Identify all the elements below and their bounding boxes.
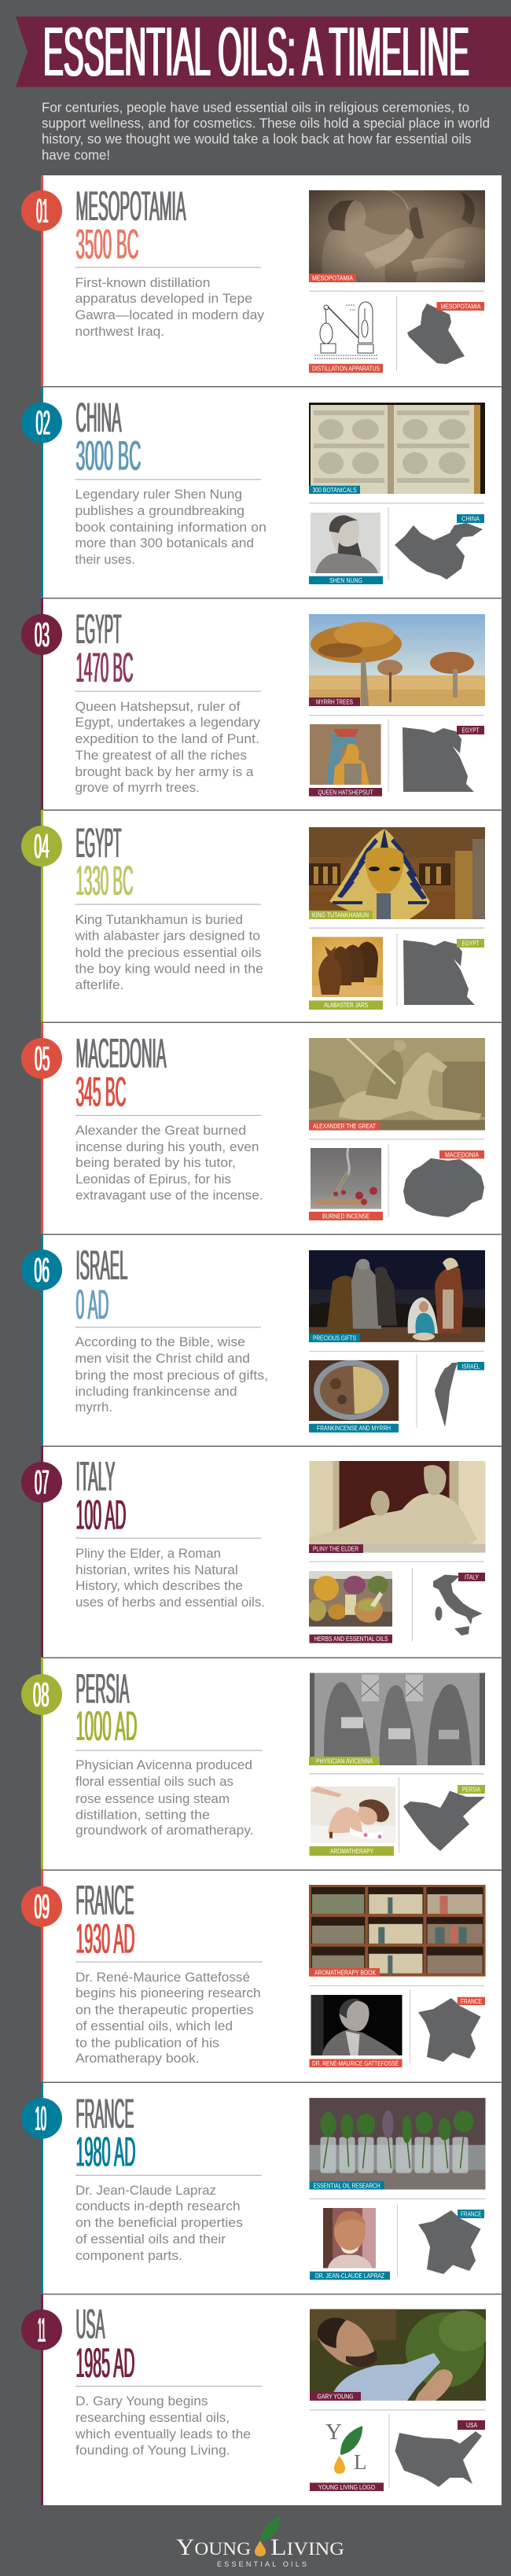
map: Egypt xyxy=(403,939,484,1005)
panel: 01 Mesopotamia xyxy=(21,175,485,387)
caption: GARY YOUNG xyxy=(318,2394,354,2400)
panel: 09 France xyxy=(21,1870,486,2082)
body text xyxy=(74,912,263,992)
body text: afterlife. xyxy=(75,977,124,992)
map: Macedonia xyxy=(403,1150,484,1217)
photo: old botanical book xyxy=(309,403,485,494)
map: Persia xyxy=(403,1785,485,1851)
number badge 11 xyxy=(21,2309,62,2350)
caption: 300 BOTANICALS xyxy=(313,487,357,494)
map label: EGYPT xyxy=(462,940,480,947)
logo: Young Living YL mark: L xyxy=(354,2450,366,2474)
panel: 10 France xyxy=(21,2082,486,2294)
body text: Dr. Jean-Claude Lapraz xyxy=(75,2183,216,2198)
panel: 03 Egypt xyxy=(21,598,485,810)
caption: HERBS AND ESSENTIAL OILS xyxy=(314,1636,388,1643)
body text: brought back by her army is a xyxy=(75,764,254,779)
map label: ITALY xyxy=(465,1574,480,1581)
panel: 11 USA: 1985 AD xyxy=(75,2340,134,2386)
panel: 01 Mesopotamia: MESOPOTAMIA xyxy=(75,183,186,230)
panel: 07 Italy xyxy=(21,1446,486,1658)
logo: Young Living YL mark: Y xyxy=(325,2420,342,2445)
body text xyxy=(75,487,267,567)
body text: Aromatherapy book. xyxy=(75,2051,200,2066)
map label: PERSIA xyxy=(462,1787,481,1793)
photo: frankincense and myrrh xyxy=(309,1360,399,1433)
body text: Physician Avicenna produced xyxy=(75,1757,252,1772)
panel: 02 China: CHINA xyxy=(75,395,121,441)
body text xyxy=(75,275,265,339)
number badge 02 xyxy=(21,403,62,443)
intro text: history, so we thought we would take a look back at how far essential oils xyxy=(42,131,472,146)
body text xyxy=(75,699,260,795)
body text: Queen Hatshepsut, ruler of xyxy=(75,699,241,714)
intro text: have come! xyxy=(42,147,110,163)
number badge 09 xyxy=(21,1886,62,1926)
body text: incense during his youth, even xyxy=(75,1139,259,1154)
caption: DR. JEAN-CLAUDE LAPRAZ xyxy=(315,2272,384,2280)
caption: QUEEN HATSHEPSUT xyxy=(318,789,373,796)
panel: 08 Persia xyxy=(21,1658,485,1870)
map: China xyxy=(395,514,484,580)
caption xyxy=(310,2392,361,2401)
body text: historian, writes his Natural xyxy=(75,1562,238,1577)
panel: 09 France: FRANCE xyxy=(75,1877,134,1923)
panel: 10 France: FRANCE xyxy=(75,2091,134,2137)
body text: apparatus developed in Tepe xyxy=(75,291,252,306)
number badge 08 xyxy=(21,1674,62,1715)
map label: USA xyxy=(466,2422,478,2429)
accent strip xyxy=(41,1446,43,1658)
body text: with alabaster jars designed to xyxy=(74,929,260,944)
body text xyxy=(75,1546,265,1610)
number badge 02: 02 xyxy=(35,404,50,443)
body text: of essential oils, which led xyxy=(75,2018,233,2033)
body text: on the therapeutic properties xyxy=(75,2002,254,2018)
map label: FRANCE xyxy=(461,1998,482,2005)
accent strip xyxy=(41,1870,43,2082)
map: France xyxy=(418,2210,484,2274)
number badge 04 xyxy=(21,826,62,867)
body text: their uses. xyxy=(75,552,135,567)
caption: YOUNG LIVING LOGO xyxy=(318,2484,375,2491)
body text: conducts in-depth research xyxy=(75,2199,241,2214)
body text: D. Gary Young begins xyxy=(75,2394,208,2409)
map: Egypt xyxy=(403,726,484,792)
body text: including frankincense and xyxy=(75,1384,237,1399)
divider xyxy=(41,1022,502,1023)
body text: expedition to the land of Punt. xyxy=(75,731,259,746)
body text: component parts. xyxy=(75,2248,182,2263)
number badge 07 xyxy=(21,1462,62,1503)
caption: BURNED INCENSE xyxy=(322,1213,369,1220)
body text: King Tutankhamun is buried xyxy=(75,912,243,927)
photo: Dr. Jean-Claude Lapraz xyxy=(310,2208,390,2280)
body text xyxy=(75,1757,254,1838)
divider xyxy=(41,1234,502,1235)
body text: extravagant use of the incense. xyxy=(75,1187,263,1203)
body text: book containing information on xyxy=(75,520,267,535)
wordmark: Living: LIVING xyxy=(270,2534,344,2560)
body text xyxy=(75,1334,268,1415)
body text: distillation, setting the xyxy=(75,1807,210,1823)
map label: FRANCE xyxy=(461,2211,481,2217)
caption: SHEN NUNG xyxy=(329,577,362,584)
divider xyxy=(41,598,502,599)
body text: hold the precious essential oils xyxy=(75,945,261,960)
number badge 01 xyxy=(21,190,62,231)
accent strip xyxy=(41,810,43,1022)
caption: PRECIOUS GIFTS xyxy=(313,1335,356,1341)
photo: King Tutankhamun mask xyxy=(309,827,485,919)
wordmark: Essential Oils: ESSENTIAL OILS xyxy=(217,2560,307,2568)
panel: 11 USA: USA xyxy=(75,2301,105,2347)
body text: men visit the Christ child and xyxy=(75,1351,250,1366)
illustration: distillation apparatus xyxy=(309,302,383,373)
body text: Pliny the Elder, a Roman xyxy=(75,1546,221,1561)
divider xyxy=(41,810,502,811)
body text xyxy=(75,2183,243,2263)
panel: 08 Persia: 1000 AD xyxy=(75,1703,137,1750)
intro text: For centuries, people have used essential oils in religious ceremonies, to xyxy=(42,100,469,116)
accent strip xyxy=(41,1022,43,1235)
body text: on the beneficial properties xyxy=(75,2215,243,2230)
panel: 01 Mesopotamia: 3500 BC xyxy=(75,222,138,268)
panel: 05 Macedonia xyxy=(21,1022,485,1235)
photo: Gary Young with plant xyxy=(310,2309,489,2401)
divider xyxy=(41,1870,502,1871)
map label: MACEDONIA xyxy=(445,1151,480,1159)
panel: 03 Egypt: EGYPT xyxy=(75,606,121,653)
panel: 03 Egypt: 1470 BC xyxy=(75,645,133,691)
photo: Pliny the Elder statue xyxy=(309,1461,486,1553)
caption: AROMATHERAPY xyxy=(330,1848,374,1855)
map: Israel xyxy=(435,1362,484,1427)
caption: PHYSICIAN AVICENNA xyxy=(316,1758,373,1765)
panel: 02 China: 3000 BC xyxy=(75,433,141,480)
divider xyxy=(41,386,502,387)
body text: northwest Iraq. xyxy=(75,324,164,339)
divider xyxy=(41,2082,502,2083)
number badge 04: 04 xyxy=(34,827,49,866)
caption: DR. RENÉ-MAURICE GATTEFOSSÉ xyxy=(312,2060,399,2067)
accent strip xyxy=(41,1235,43,1446)
photo: myrrh trees xyxy=(309,614,485,706)
logo: Young Living YL mark xyxy=(310,2420,384,2491)
map: France xyxy=(418,1997,485,2062)
panel: 09 France: 1930 AD xyxy=(75,1915,134,1962)
caption: MYRRH TREES xyxy=(316,698,353,706)
caption: ALABASTER JARS xyxy=(324,1002,368,1009)
icon: oil drop xyxy=(255,2541,266,2556)
photo: aromatherapy massage xyxy=(310,1787,395,1856)
number badge 06: 06 xyxy=(34,1251,49,1290)
accent strip xyxy=(41,175,43,387)
body text: groundwork of aromatherapy. xyxy=(75,1823,254,1838)
accent strip xyxy=(41,2082,43,2294)
body text xyxy=(75,2394,251,2458)
body text: myrrh. xyxy=(75,1400,112,1415)
body text: According to the Bible, wise xyxy=(75,1334,245,1349)
intro text xyxy=(42,100,490,163)
illustration: Physician Avicenna woodcut xyxy=(309,1673,485,1765)
body text: the boy king would need in the xyxy=(75,962,263,977)
panel: 07 Italy: ITALY xyxy=(75,1454,115,1500)
body text: being berated by his tutor, xyxy=(75,1155,236,1170)
panel: 05 Macedonia: MACEDONIA xyxy=(75,1030,166,1077)
body text: Alexander the Great burned xyxy=(75,1123,246,1138)
caption: MESOPOTAMIA xyxy=(312,275,354,282)
photo: Dr. René-Maurice Gattefossé xyxy=(310,1995,403,2067)
intro text: support wellness, and for cosmetics. These oils hold a special place in world xyxy=(42,116,490,131)
caption: KING TUTANKHAMUN xyxy=(312,912,369,918)
wordmark: Young: YOUNG xyxy=(176,2534,251,2560)
panel: 07 Italy: 100 AD xyxy=(75,1492,126,1539)
panel: 04 Egypt: EGYPT xyxy=(75,820,121,867)
caption: ESSENTIAL OIL RESEARCH xyxy=(313,2183,380,2189)
number badge 01: 01 xyxy=(36,192,48,230)
body text: Leonidas of Epirus, for his xyxy=(75,1172,231,1187)
body text: rose essence using steam xyxy=(75,1791,230,1806)
panel: 06 Israel: ISRAEL xyxy=(75,1242,127,1289)
accent strip xyxy=(41,598,43,810)
body text: which eventually leads to the xyxy=(75,2427,251,2442)
body text: founding of Young Living. xyxy=(75,2443,230,2458)
body text: First-known distillation xyxy=(75,275,211,290)
caption: AROMATHERAPY BOOK xyxy=(314,1969,377,1977)
number badge 10: 10 xyxy=(35,2099,46,2138)
number badge 11: 11 xyxy=(38,2311,46,2350)
number badge 05 xyxy=(21,1038,62,1079)
icon: leaf xyxy=(260,2516,280,2541)
body text: of essential oils and their xyxy=(75,2232,226,2247)
panel: 11 USA xyxy=(21,2294,489,2505)
number badge 07: 07 xyxy=(35,1463,49,1502)
number badge 09: 09 xyxy=(34,1887,49,1926)
body text xyxy=(75,1123,263,1203)
map label: ISRAEL xyxy=(462,1363,480,1370)
caption xyxy=(309,697,360,706)
photo: burned incense xyxy=(309,1148,383,1220)
photo: plants in bottles xyxy=(310,2098,486,2189)
photo: nativity scene xyxy=(309,1250,485,1342)
body text: Legendary ruler Shen Nung xyxy=(75,487,242,502)
photo: Alexander the Great relief xyxy=(309,1038,485,1130)
body text: History, which describes the xyxy=(75,1578,243,1593)
photo: herbs and essential oils xyxy=(307,1571,392,1643)
photo: alabaster jars xyxy=(309,937,383,1010)
accent strip xyxy=(41,1658,43,1870)
panel: 04 Egypt xyxy=(21,810,485,1022)
number badge 03 xyxy=(21,614,62,655)
panel: 04 Egypt: 1330 BC xyxy=(75,858,133,904)
map label: MESOPOTAMIA xyxy=(440,304,481,310)
number badge 08: 08 xyxy=(33,1676,49,1714)
panel: 06 Israel: 0 AD xyxy=(75,1282,108,1328)
caption: ALEXANDER THE GREAT xyxy=(313,1123,376,1130)
panel: 08 Persia: PERSIA xyxy=(75,1665,129,1712)
body text: begins his pioneering research xyxy=(75,1985,261,2000)
painting: Queen Hatshepsut xyxy=(309,724,382,797)
body text: floral essential oils such as xyxy=(75,1774,233,1789)
body text: Dr. René-Maurice Gattefossé xyxy=(75,1970,250,1985)
caption: FRANKINCENSE AND MYRRH xyxy=(317,1425,391,1432)
map label: EGYPT xyxy=(462,727,480,734)
number badge 06 xyxy=(21,1249,62,1290)
panel: 05 Macedonia: 345 BC xyxy=(75,1069,126,1116)
photo: aromatherapy bookshelf xyxy=(309,1885,486,1977)
map: USA xyxy=(395,2420,485,2487)
body text: grove of myrrh trees. xyxy=(75,780,200,795)
body text: uses of herbs and essential oils. xyxy=(75,1595,265,1610)
body text: to the publication of his xyxy=(75,2036,219,2051)
panel: 10 France: 1980 AD xyxy=(75,2129,135,2175)
body text: publishes a groundbreaking xyxy=(75,503,244,518)
caption: DISTILLATION APPARATUS xyxy=(312,365,380,373)
footer logo: Young Living Essential Oils xyxy=(176,2516,344,2568)
body text: researching essential oils, xyxy=(75,2410,230,2425)
photo: Mesopotamia relief xyxy=(309,190,485,282)
map: Italy xyxy=(433,1573,485,1636)
body text: bring the most precious of gifts, xyxy=(75,1368,268,1383)
body text: The greatest of all the riches xyxy=(75,748,247,763)
number badge 10 xyxy=(21,2098,62,2139)
accent strip xyxy=(41,2294,43,2505)
portrait: Shen Nung xyxy=(309,513,383,584)
map: Iraq xyxy=(407,302,484,364)
number badge 03: 03 xyxy=(35,616,49,654)
map label: CHINA xyxy=(461,516,480,522)
body text: Gawra—located in modern day xyxy=(75,307,265,322)
panel: 02 China xyxy=(21,387,485,598)
divider xyxy=(41,1445,502,1447)
caption: PLINY THE ELDER xyxy=(313,1546,358,1552)
number badge 05: 05 xyxy=(35,1040,50,1078)
body text xyxy=(75,1970,261,2066)
body text: more than 300 botanicals and xyxy=(75,535,254,550)
accent strip xyxy=(41,387,43,598)
body text: Egypt, undertakes a legendary xyxy=(75,715,260,730)
panel: 06 Israel xyxy=(21,1235,485,1446)
